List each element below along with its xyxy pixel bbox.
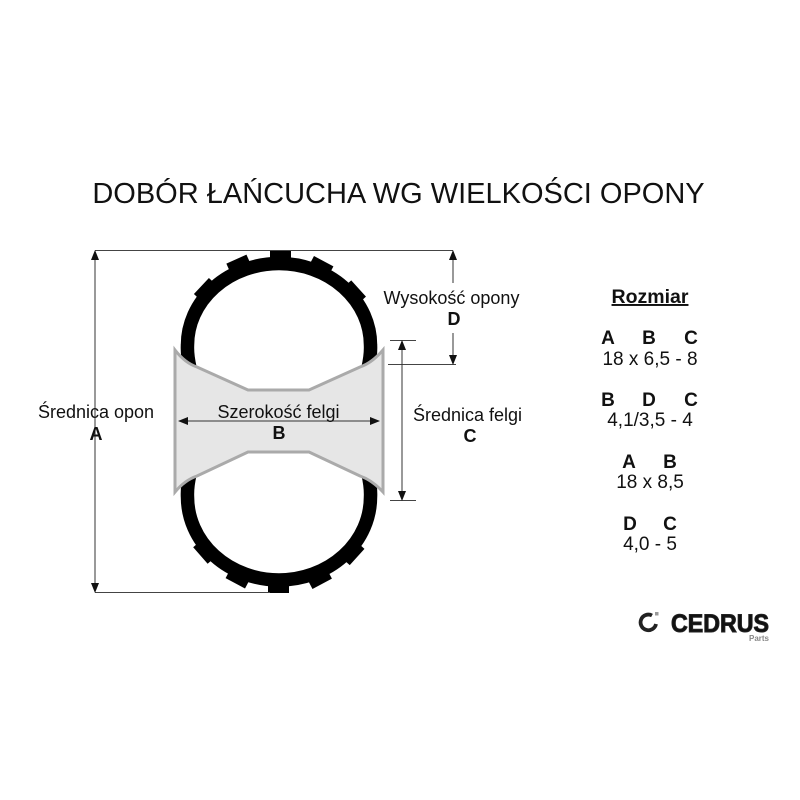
label: tire diameter: A	[90, 424, 102, 444]
label: tire diameter	[38, 401, 154, 444]
legend row: B D C: B	[601, 390, 615, 411]
label: rim diameter: C	[464, 426, 476, 446]
tire: bottom half	[187, 474, 371, 593]
dimension lines	[95, 250, 456, 592]
legend row: A B: 18 x 8,5	[616, 472, 684, 493]
label: tire height	[384, 288, 519, 329]
arrow: tire height D lower	[452, 333, 454, 364]
legend row: A B: A	[622, 452, 636, 473]
title: DOBÓR ŁAŃCUCHA WG WIELKOŚCI OPONY	[92, 176, 705, 210]
arrow: tire diameter A	[94, 251, 96, 592]
label: tire height: Wysokość opony	[384, 288, 519, 308]
legend row: A B C: A	[601, 328, 615, 349]
label: rim diameter	[413, 404, 522, 446]
label: rim width	[217, 402, 340, 443]
size legend	[601, 286, 698, 555]
legend row: B D C: C	[684, 390, 698, 411]
legend row: A B C: B	[642, 328, 656, 349]
arrow: rim diameter C	[401, 341, 403, 500]
arrow: rim width B	[179, 420, 379, 422]
logo: Cedrus Parts	[641, 610, 770, 643]
icon: logo ring	[641, 615, 656, 630]
legend row: D C: D	[623, 514, 637, 535]
legend row: A B C	[601, 328, 698, 370]
legend row: A B: B	[663, 452, 677, 473]
legend row: B D C: D	[642, 390, 656, 411]
legend row: D C	[623, 514, 677, 555]
tire: top half	[187, 251, 371, 368]
label: rim width: B	[272, 423, 286, 443]
legend row: D C: C	[663, 514, 677, 535]
label: tire diameter: Średnica opon	[38, 401, 154, 422]
legend row: A B	[616, 452, 684, 493]
diagram: tire and rim	[175, 251, 383, 593]
label: tire height: D	[448, 309, 460, 329]
legend row: D C: 4,0 - 5	[623, 534, 677, 555]
arrow: tire height D upper	[452, 251, 454, 283]
legend row: A B C: C	[684, 328, 698, 349]
logo: Cedrus Parts: Parts	[749, 634, 770, 643]
logo: Cedrus Parts: CEDRUS	[671, 610, 769, 638]
legend heading: Rozmiar	[612, 286, 689, 308]
legend row: B D C: 4,1/3,5 - 4	[607, 410, 693, 431]
legend row: A B C: 18 x 6,5 - 8	[602, 349, 698, 370]
label: rim width: Szerokość felgi	[217, 402, 340, 422]
legend row: B D C	[601, 390, 698, 431]
rim	[175, 350, 383, 492]
label: rim diameter: Średnica felgi	[413, 404, 522, 425]
